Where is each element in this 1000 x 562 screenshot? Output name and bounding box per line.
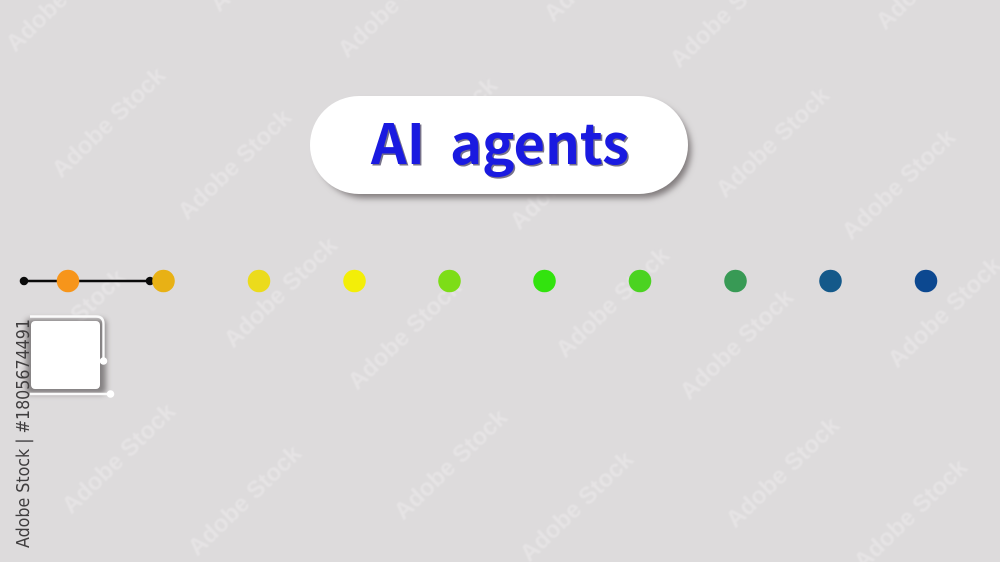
watermark pattern: Adobe Stock <box>675 283 799 405</box>
watermark pattern: Adobe Stock <box>389 403 513 525</box>
title text <box>370 100 630 182</box>
watermark pattern: Adobe Stock <box>505 113 629 235</box>
watermark pattern: Adobe Stock <box>721 411 845 533</box>
side stock id text: Adobe Stock | #1805674491 <box>13 319 34 548</box>
title pill <box>310 96 691 198</box>
timeline dots <box>57 270 937 292</box>
card with white callout lines <box>26 316 114 398</box>
title text: agents <box>452 102 630 182</box>
watermark pattern: Adobe Stock <box>7 263 131 385</box>
watermark pattern: Adobe Stock <box>343 273 467 395</box>
watermark pattern: Adobe Stock <box>551 241 675 363</box>
watermark pattern: Adobe Stock <box>183 439 307 561</box>
watermark pattern: Adobe Stock <box>57 397 181 519</box>
watermark pattern: Adobe Stock <box>837 123 961 245</box>
watermark pattern: Adobe Stock <box>47 61 171 183</box>
title text: agents <box>450 100 629 180</box>
title text: AI <box>371 102 426 182</box>
watermark pattern: Adobe Stock <box>219 231 343 353</box>
watermark pattern: Adobe Stock <box>711 81 835 203</box>
watermark pattern: Adobe Stock <box>173 103 297 225</box>
title text: AI <box>370 100 425 180</box>
watermark pattern: Adobe Stock <box>379 71 503 193</box>
black connector line with end nodes <box>20 277 154 285</box>
